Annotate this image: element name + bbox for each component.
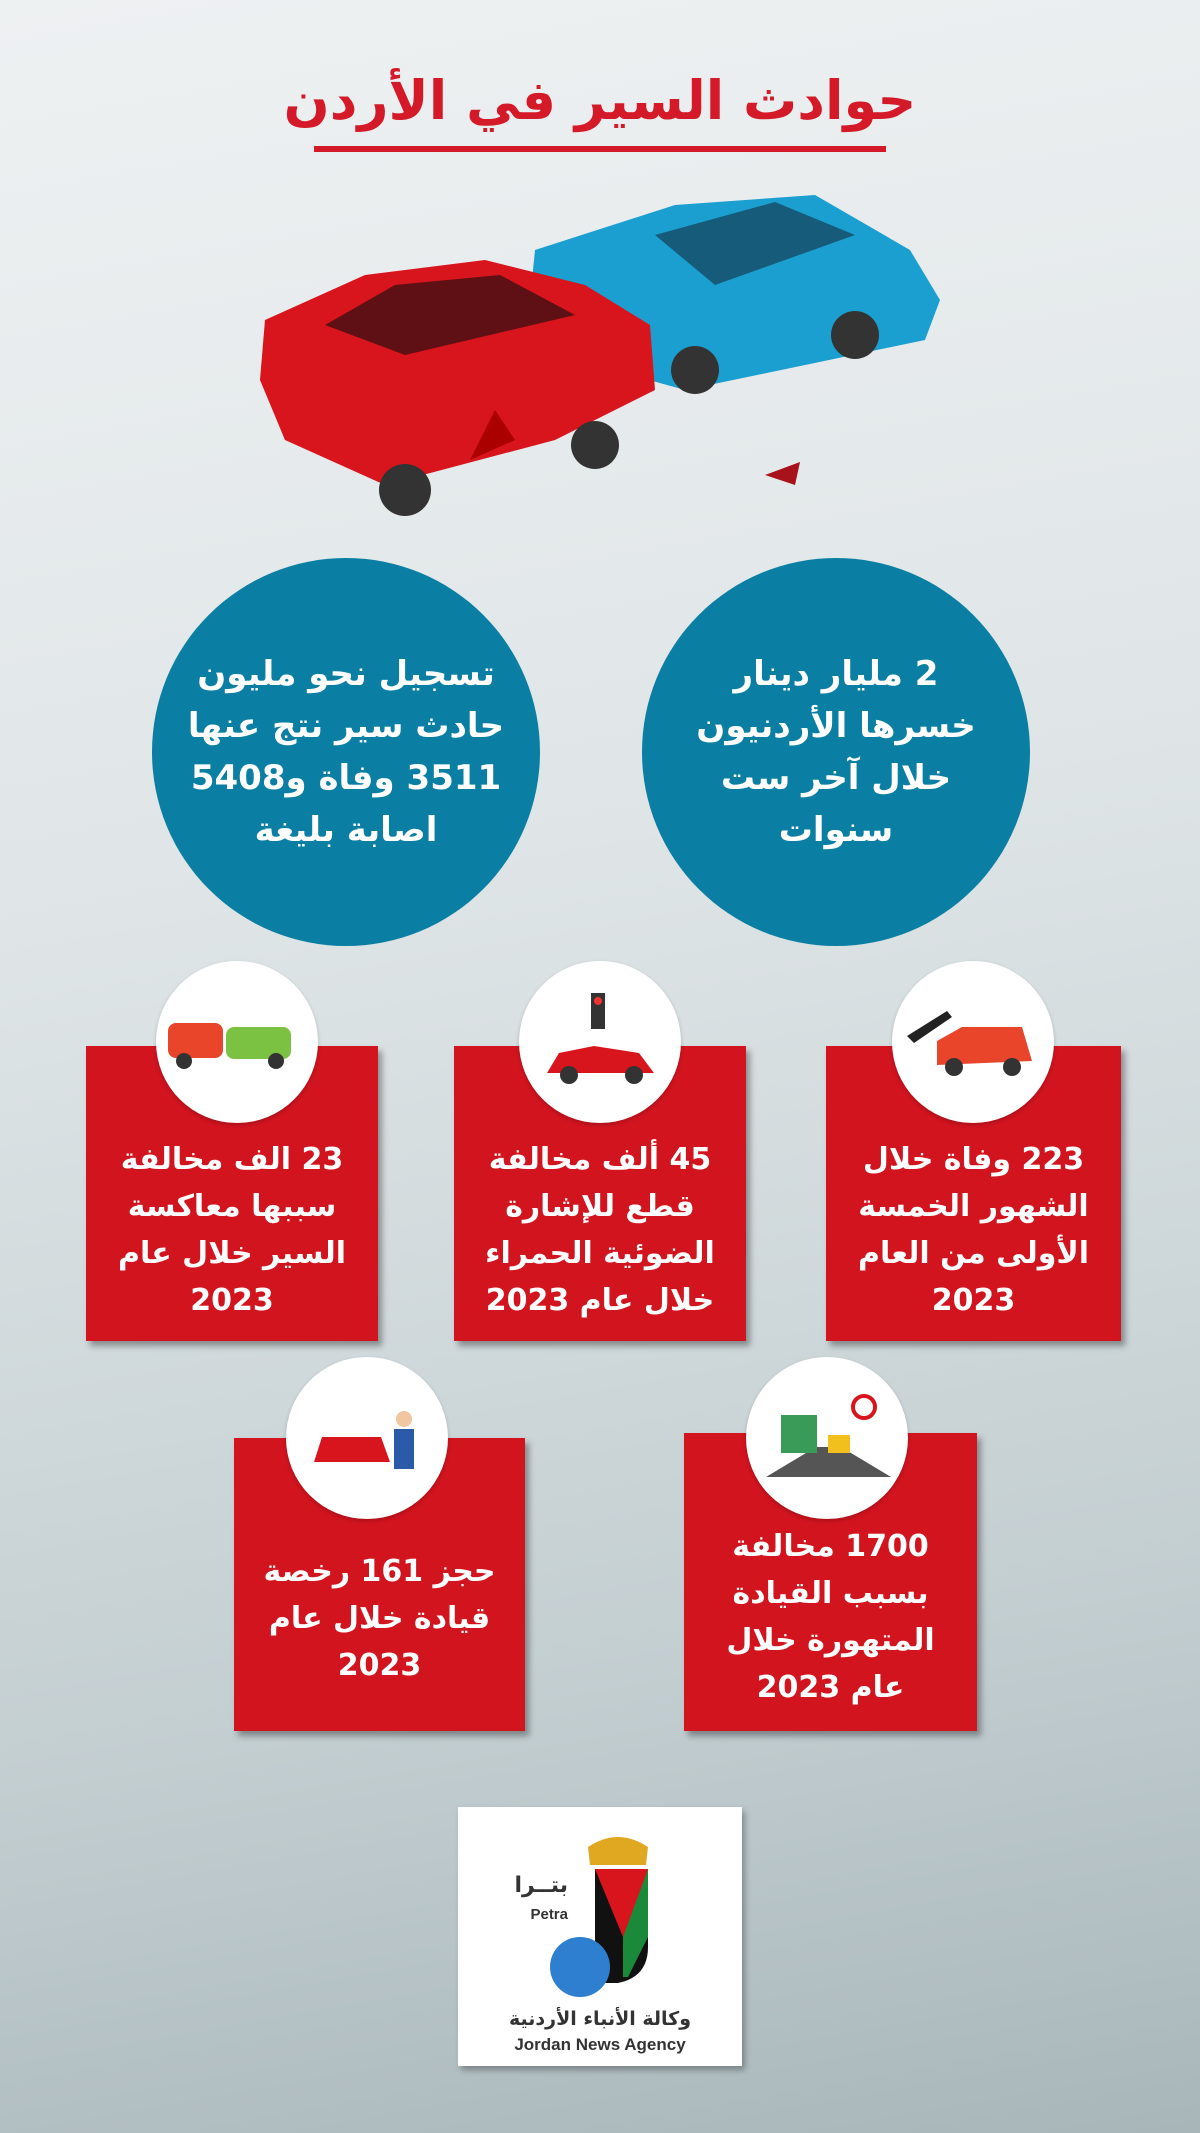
logo: Petra: وكالة الأنباء الأردنية xyxy=(509,2007,691,2030)
icon: truck and sign xyxy=(746,1357,908,1519)
logo: Petra: Petra xyxy=(530,1906,569,1923)
box: reckless driving xyxy=(684,1433,977,1731)
box: deaths: الشهور الخمسة xyxy=(858,1189,1089,1224)
box: red light: خلال عام 2023 xyxy=(486,1283,714,1318)
box: deaths: 2023 xyxy=(932,1283,1015,1318)
box: red light: قطع للإشارة xyxy=(505,1189,695,1224)
box: licenses xyxy=(234,1438,525,1731)
box: reckless driving: بسبب القيادة xyxy=(732,1576,928,1611)
illustration: crashed cars xyxy=(260,195,940,516)
logo: Petra: Jordan News Agency xyxy=(514,2035,686,2054)
icon: traffic light and car xyxy=(519,961,681,1123)
box: red light: الضوئية الحمراء xyxy=(485,1236,715,1271)
box: deaths: 223 وفاة خلال xyxy=(863,1142,1084,1177)
box: licenses: حجز 161 رخصة xyxy=(263,1554,496,1589)
icon: police and car xyxy=(286,1357,448,1519)
box: reckless driving: عام 2023 xyxy=(757,1670,904,1705)
box: red light xyxy=(454,1046,746,1341)
box: red light: 45 ألف مخالفة xyxy=(489,1142,711,1177)
circle: accidents: اصابة بليغة xyxy=(255,810,437,850)
box: wrong-way: السير خلال عام xyxy=(118,1236,346,1271)
circle: accidents: 3511 وفاة و5408 xyxy=(191,758,501,798)
circle: losses: خسرها الأردنيون xyxy=(696,706,976,746)
circle: accidents xyxy=(152,558,540,946)
box: licenses: 2023 xyxy=(338,1648,421,1683)
box: deaths xyxy=(826,1046,1121,1341)
box: wrong-way: 2023 xyxy=(190,1283,274,1318)
circle: losses: 2 مليار دينار xyxy=(734,654,938,694)
box: reckless driving: 1700 مخالفة xyxy=(732,1529,929,1564)
circle: losses xyxy=(642,558,1030,946)
box: reckless driving: المتهورة خلال xyxy=(726,1623,935,1658)
circle: accidents: تسجيل نحو مليون xyxy=(197,654,495,694)
circle: losses: خلال آخر ست xyxy=(721,758,951,798)
box: wrong-way: سببها معاكسة xyxy=(128,1189,336,1224)
logo: Petra: بتــرا xyxy=(514,1873,568,1898)
circle: accidents: حادث سير نتج عنها xyxy=(188,706,504,746)
icon: pedestrian hit xyxy=(892,961,1054,1123)
box: wrong-way: 23 الف مخالفة xyxy=(121,1142,343,1177)
box: wrong-way xyxy=(86,1046,378,1341)
box: licenses: قيادة خلال عام xyxy=(269,1601,490,1636)
circle: losses: سنوات xyxy=(779,810,893,850)
box: deaths: الأولى من العام xyxy=(858,1236,1089,1271)
icon: collision xyxy=(156,961,318,1123)
title: حوادث السير في الأردن xyxy=(284,69,916,132)
logo: Petra xyxy=(458,1807,742,2066)
